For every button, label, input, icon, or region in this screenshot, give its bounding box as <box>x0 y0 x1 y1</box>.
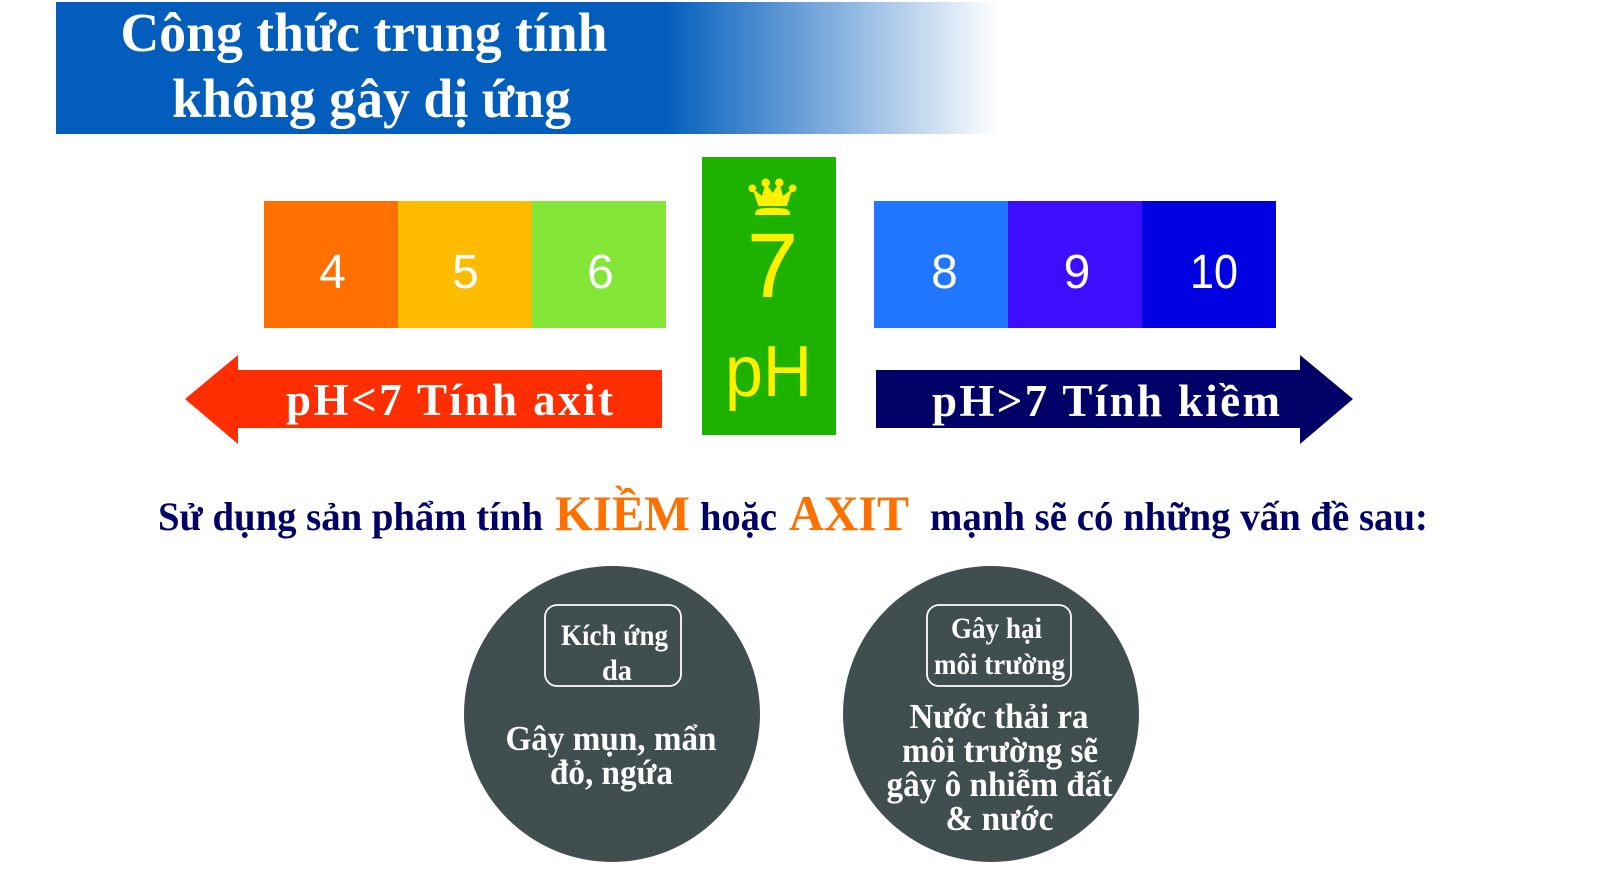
warning heading: Sử dụng sản phẩm tính <box>158 494 543 539</box>
label box: environmental harm: Gây hại <box>951 612 1042 645</box>
environmental harm description <box>886 697 1113 838</box>
alkaline scale 8-10: 10 <box>1190 246 1238 299</box>
acidic scale 4-6: 5 <box>452 246 479 299</box>
skin irritation description: Gây mụn, mẩn <box>506 719 716 758</box>
environmental harm description: & nước <box>946 799 1054 838</box>
pH label: pH <box>725 332 812 412</box>
environmental harm description: Nước thải ra <box>910 697 1088 736</box>
title text <box>120 2 608 129</box>
arrow: alkaline <box>876 355 1353 444</box>
label box: skin irritation: da <box>602 654 632 687</box>
arrow: alkaline: pH>7 Tính kiềm <box>932 376 1280 426</box>
label box: environmental harm <box>927 605 1071 686</box>
environmental harm description: gây ô nhiễm đất <box>886 765 1113 804</box>
arrow: acidic <box>185 355 662 444</box>
warning heading: mạnh sẽ có những vấn đề sau: <box>930 494 1428 539</box>
acidic scale 4-6: 6 <box>587 246 614 299</box>
label box: skin irritation <box>545 605 681 687</box>
acidic scale 4-6: 4 <box>319 246 346 299</box>
environmental harm description: môi trường sẽ <box>902 731 1098 770</box>
panel: environmental harm <box>843 566 1139 862</box>
icon: crown <box>748 178 796 215</box>
alkaline scale 8-10: 8 <box>931 246 958 299</box>
number 7: 7 <box>747 216 798 317</box>
skin irritation description <box>506 719 716 792</box>
warning heading: AXIT <box>789 485 909 541</box>
alkaline scale 8-10 <box>874 201 1276 328</box>
panel: skin irritation <box>464 566 760 862</box>
skin irritation description: đỏ, ngứa <box>550 753 673 792</box>
warning heading: KIỀM <box>555 484 690 541</box>
title banner <box>56 2 1000 134</box>
title text: Công thức trung tính <box>120 2 608 63</box>
label box: environmental harm: môi trường <box>934 648 1065 681</box>
acidic scale 4-6 <box>264 201 666 328</box>
label box: skin irritation: Kích ứng <box>561 619 668 652</box>
alkaline scale 8-10: 9 <box>1064 246 1090 299</box>
arrow: acidic: pH<7 Tính axit <box>286 375 613 425</box>
warning heading <box>158 484 1428 541</box>
neutral pH 7 panel <box>702 157 836 435</box>
warning heading: hoặc <box>700 494 777 539</box>
title text: không gây dị ứng <box>172 68 571 129</box>
